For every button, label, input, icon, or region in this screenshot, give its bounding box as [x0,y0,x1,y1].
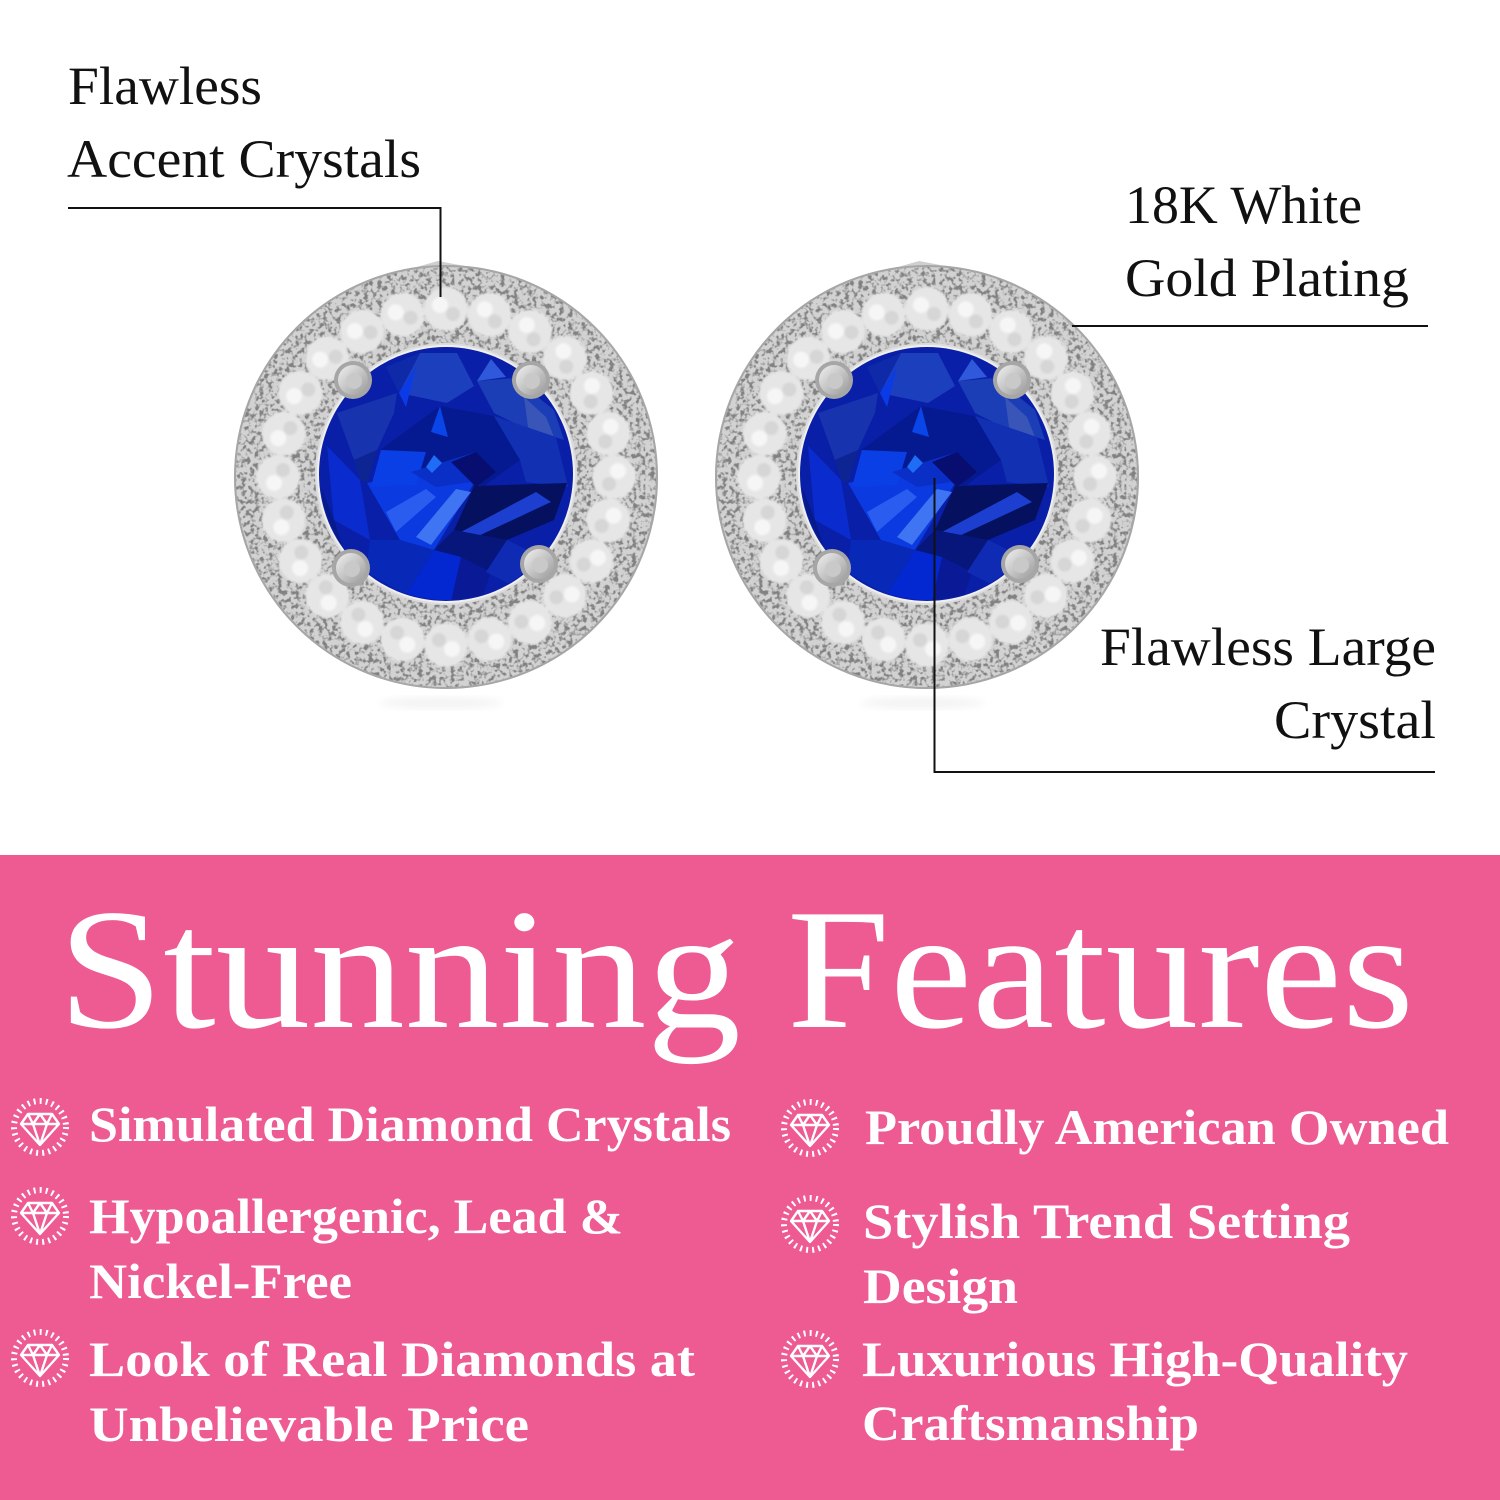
right earring [715,261,1139,708]
callout: flawless large crystal [934,478,1436,772]
feature: stylish design: Stylish Trend Setting [863,1193,1350,1249]
callout: flawless accent crystals [67,56,440,297]
feature: luxurious craftsmanship: Craftsmanship [862,1395,1199,1451]
feature: hypoallergenic [14,1188,623,1309]
feature: stylish design: Design [863,1258,1018,1314]
feature: stylish design [784,1193,1350,1314]
callout: 18K white gold plating: 18K White [1125,175,1362,235]
feature: hypoallergenic: Nickel-Free [89,1253,352,1309]
feature: hypoallergenic: Hypoallergenic, Lead & [89,1188,623,1244]
feature: look of real diamonds: Look of Real Diamonds at [89,1331,695,1387]
feature: luxurious craftsmanship [784,1331,1408,1451]
feature: look of real diamonds: Unbelievable Price [89,1396,529,1452]
white product background [0,0,1500,855]
title: Stunning [58,875,741,1065]
title [58,875,1414,1065]
left earring [234,261,658,708]
callout: flawless large crystal: Crystal [1274,690,1436,750]
callout: flawless accent crystals: Flawless [68,56,262,116]
callout: 18K white gold plating [1072,175,1428,326]
callout: 18K white gold plating: Gold Plating [1125,248,1409,308]
panel: stunning features [0,855,1500,1500]
callout: flawless large crystal: Flawless Large [1100,617,1436,677]
feature: look of real diamonds [14,1331,695,1452]
feature: proudly american owned: Proudly American Owned [865,1099,1449,1155]
feature: luxurious craftsmanship: Luxurious High-Quality [862,1331,1408,1387]
callout: flawless accent crystals: Accent Crystals [67,129,421,189]
feature: simulated diamond crystals: Simulated Diamond Crystals [89,1096,731,1152]
title: Features [787,875,1414,1065]
